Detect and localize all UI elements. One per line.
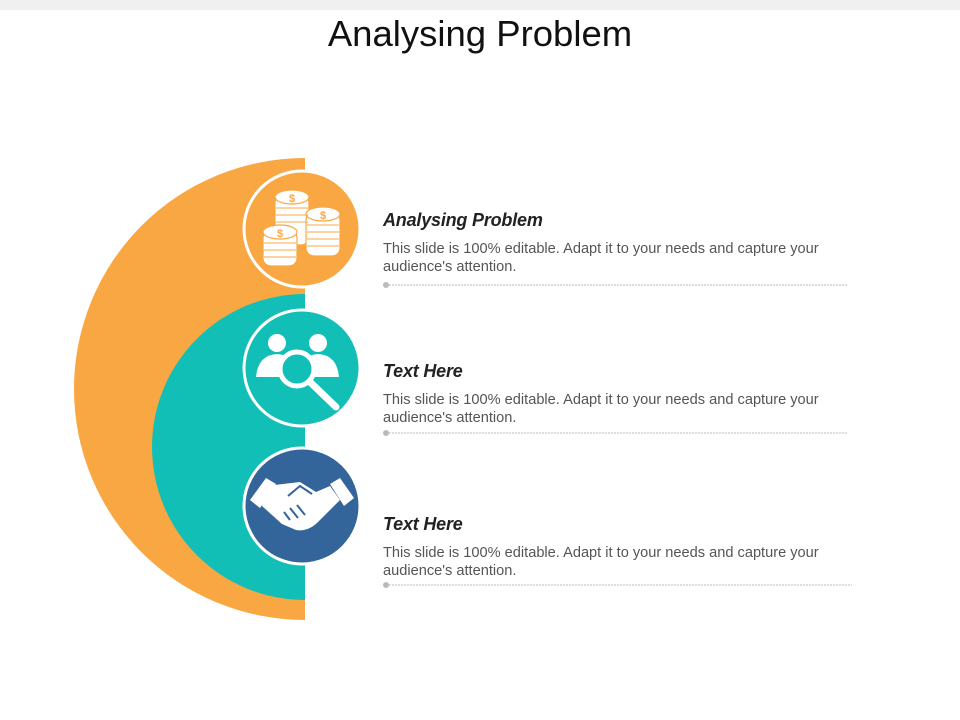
icon: coins: $ xyxy=(320,210,326,222)
orange half circle xyxy=(74,158,305,620)
dividers xyxy=(386,285,852,585)
text block 3 xyxy=(383,514,819,579)
text block 2 xyxy=(383,361,819,426)
icon: coins: $ xyxy=(289,193,295,205)
text block 3: Text Here xyxy=(383,514,463,534)
text block 1 xyxy=(382,210,819,275)
icon: people search xyxy=(244,310,360,426)
icon: handshake xyxy=(244,448,360,564)
text block 2: This slide is 100% editable. Adapt it to your needs and capture your audience's attention. xyxy=(383,392,819,426)
text block 3: This slide is 100% editable. Adapt it to your needs and capture your audience's attention. xyxy=(383,545,819,579)
title: Analysing Problem xyxy=(328,13,632,54)
text block 1: This slide is 100% editable. Adapt it to your needs and capture your audience's attention. xyxy=(383,241,819,275)
text block 2: Text Here xyxy=(383,361,463,381)
text block 1: Analysing Problem xyxy=(383,210,543,230)
icon: coins xyxy=(244,171,360,287)
icon: coins: $ xyxy=(277,228,283,240)
teal half circle xyxy=(152,294,305,600)
